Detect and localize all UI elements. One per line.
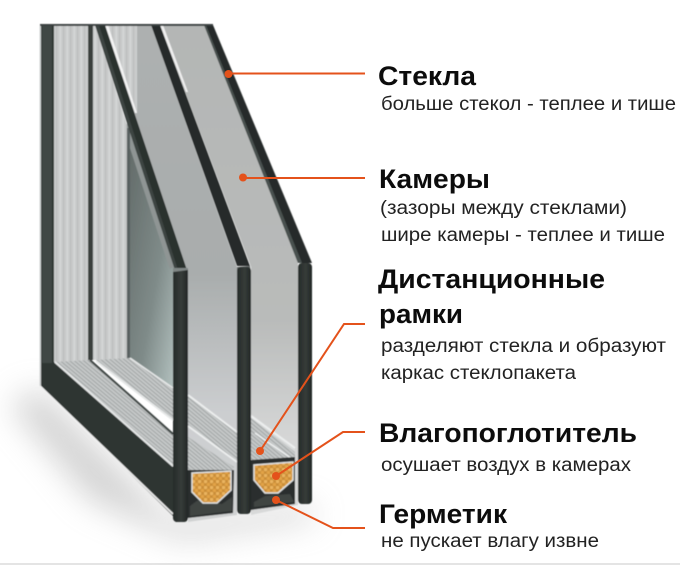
middle glass [151,25,251,514]
desiccant, outer chamber [254,462,293,493]
label: glass: больше стекол - теплее и тише [381,94,676,115]
sealant, middle chamber [188,470,234,518]
label: chambers [379,164,665,246]
striped spacer behind middle pane [106,25,137,113]
left frame and inner window [40,25,175,516]
dark frame body [40,25,173,516]
outer chamber pane [160,25,298,515]
bevel beside the inner glass [125,125,172,268]
label: chambers: шире камеры - теплее и тише [381,225,665,246]
label: glass: Стекла [378,61,477,91]
sealant, outer chamber [251,457,295,510]
inner glass [95,25,188,522]
label: spacer frames [378,264,666,384]
spacer top, middle chamber [188,437,234,472]
white bottom frame line [40,386,173,514]
label: spacer frames: разделяют стекла и образуют [381,336,666,357]
label: desiccant: Влагопоглотитель [379,418,637,448]
callout line: desiccant [272,432,365,480]
dark frame strip [88,25,93,360]
top frame edge [40,24,213,26]
callout line: spacer frames [256,324,365,455]
outer glass [204,25,312,504]
label: desiccant [379,418,637,476]
label: desiccant: осушает воздух в камерах [381,455,632,476]
callout line: chambers [239,174,365,182]
outer chamber sill [251,414,295,462]
label: glass [378,61,676,115]
label: spacer frames: каркас стеклопакета [381,363,576,384]
inner window glass [127,122,175,392]
label: sealant: Герметик [379,499,507,529]
bottom page edge [0,563,680,565]
spacer top, outer chamber [251,418,295,464]
label: sealant [379,499,599,552]
label: chambers: (зазоры между стеклами) [380,198,627,219]
window unit illustration [40,24,312,522]
middle chamber pane [105,25,237,522]
desiccant, middle chamber [192,471,231,503]
label: chambers: Камеры [379,164,490,194]
callout line: glass [224,70,365,78]
floor shadow [10,388,315,540]
label: spacer frames: Дистанционные [378,264,605,294]
second sill [96,358,173,420]
callout line: sealant [272,496,365,528]
first sill [55,360,173,466]
label: sealant: не пускает влагу извне [381,531,599,552]
striped frame strips [54,25,88,362]
sill in middle chamber [188,395,237,461]
label: spacer frames: рамки [379,299,463,329]
